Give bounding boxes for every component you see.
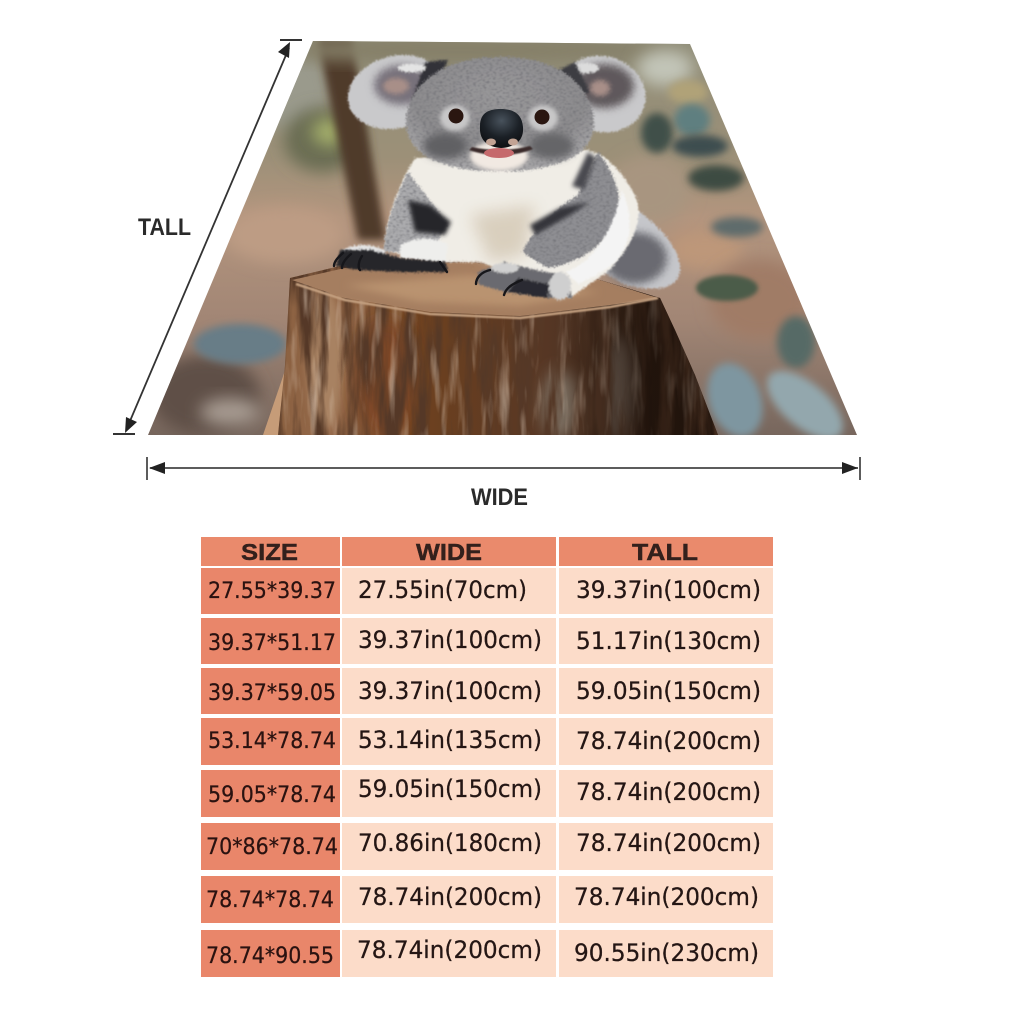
koala head xyxy=(406,57,594,171)
koala xyxy=(334,45,680,300)
row 3 xyxy=(201,668,773,714)
row 3: 39.37*59.05 xyxy=(208,681,336,706)
wide dimension arrow xyxy=(147,457,860,480)
row 7 xyxy=(201,876,773,923)
koala paws xyxy=(336,250,572,300)
row 2: 39.37*51.17 xyxy=(208,631,336,656)
table header xyxy=(201,537,773,566)
koala dark arm patches xyxy=(408,152,596,235)
koala face xyxy=(423,105,574,171)
row 1: 39.37in(100cm) xyxy=(576,576,761,604)
row 3: 59.05in(150cm) xyxy=(576,677,761,705)
tall dimension arrow xyxy=(113,40,302,434)
row 6: 70.86in(180cm) xyxy=(358,829,542,857)
row 8: 78.74in(200cm) xyxy=(357,936,542,964)
row 2: 51.17in(130cm) xyxy=(576,627,761,655)
table header: TALL xyxy=(632,539,698,565)
row 5: 78.74in(200cm) xyxy=(576,778,761,806)
row 7: 78.74*78.74 xyxy=(206,888,334,913)
row 6: 78.74in(200cm) xyxy=(576,829,761,857)
row 1 xyxy=(201,568,773,614)
row 4 xyxy=(201,718,773,765)
blanket product image xyxy=(140,35,865,451)
row 3: 39.37in(100cm) xyxy=(358,677,542,705)
row 6: 70*86*78.74 xyxy=(206,835,338,860)
row 4: 53.14in(135cm) xyxy=(358,726,542,754)
row 5 xyxy=(201,770,773,817)
tall label: TALL xyxy=(138,214,191,241)
koala ears xyxy=(346,54,647,134)
blurred background xyxy=(140,35,865,451)
row 2 xyxy=(201,618,773,664)
wide label: WIDE xyxy=(471,484,528,511)
koala claws xyxy=(334,253,522,295)
row 1: 27.55in(70cm) xyxy=(358,576,527,604)
row 5: 59.05in(150cm) xyxy=(358,775,542,803)
row 7: 78.74in(200cm) xyxy=(358,883,542,911)
row 8: 90.55in(230cm) xyxy=(574,939,759,967)
row 7: 78.74in(200cm) xyxy=(574,883,759,911)
row 8 xyxy=(201,930,773,977)
koala body xyxy=(385,150,639,298)
row 1: 27.55*39.37 xyxy=(208,579,336,604)
row 4: 78.74in(200cm) xyxy=(576,727,761,755)
tree stump xyxy=(263,262,719,445)
table header: SIZE xyxy=(241,539,298,565)
koala white arm xyxy=(340,190,630,284)
row 5: 59.05*78.74 xyxy=(208,783,336,808)
size table xyxy=(201,537,773,977)
table header: WIDE xyxy=(416,539,482,565)
row 6 xyxy=(201,823,773,870)
koala rear hump xyxy=(600,205,680,289)
koala grey fur patches xyxy=(384,152,619,268)
row 8: 78.74*90.55 xyxy=(206,944,334,969)
row 2: 39.37in(100cm) xyxy=(358,626,542,654)
row 4: 53.14*78.74 xyxy=(208,729,336,754)
